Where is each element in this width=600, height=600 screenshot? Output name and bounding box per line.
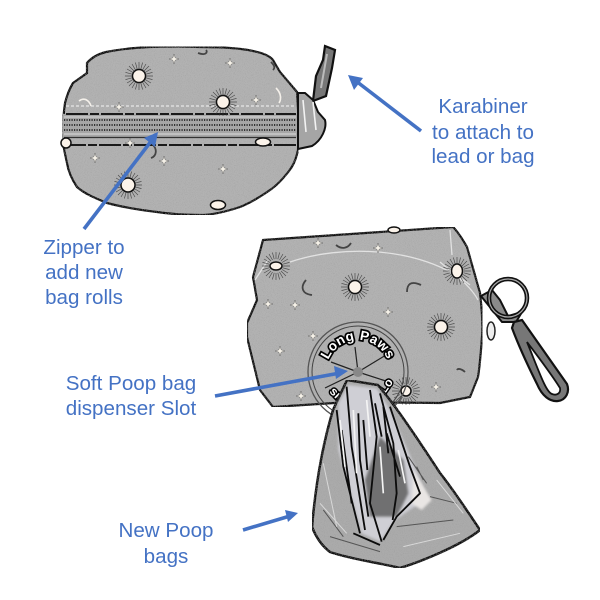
logo dispenser ring: [307, 321, 409, 414]
label: new poop bags: New Poop: [118, 519, 214, 542]
star and moon motifs: [79, 50, 281, 174]
brand text: Long Paws: [318, 328, 394, 362]
label: karabiner: lead or bag: [431, 145, 535, 168]
label: karabiner: Karabiner: [438, 95, 528, 118]
brand text lower right: Lo: [376, 376, 396, 396]
illustration: clip and carabiner: [481, 279, 568, 401]
arrow: dispenser slot: [215, 366, 348, 396]
illustration: top zipper pouch: [61, 47, 298, 215]
bag body: [312, 380, 480, 568]
fabric fold lines: [255, 230, 478, 300]
illustration: top pouch karabiner: [298, 46, 335, 149]
sun motifs: [262, 227, 471, 405]
pouch body: [247, 227, 482, 407]
illustration: dispenser pouch: [247, 226, 482, 414]
label: new poop bags: bags: [144, 545, 188, 568]
label: karabiner: to attach to: [432, 121, 534, 144]
pleats drawn on a 3x grid: [320, 385, 463, 552]
pouch body: [63, 47, 298, 215]
label: dispenser slot: Soft Poop bag: [66, 372, 196, 395]
sun motifs: [61, 62, 270, 210]
star and moon motifs: [263, 238, 465, 401]
illustration: poop bag: [312, 380, 480, 568]
label: zipper: bag rolls: [45, 286, 123, 309]
arrow: karabiner: [348, 75, 421, 131]
brand text lower left: sm: [327, 384, 349, 406]
label: zipper: Zipper to: [43, 236, 125, 259]
zipper band: [63, 106, 297, 145]
label: zipper: add new: [45, 261, 123, 284]
arrow: new poop bags: [243, 510, 298, 530]
arrow: zipper: [84, 132, 158, 229]
label: dispenser slot: dispenser Slot: [66, 397, 197, 420]
